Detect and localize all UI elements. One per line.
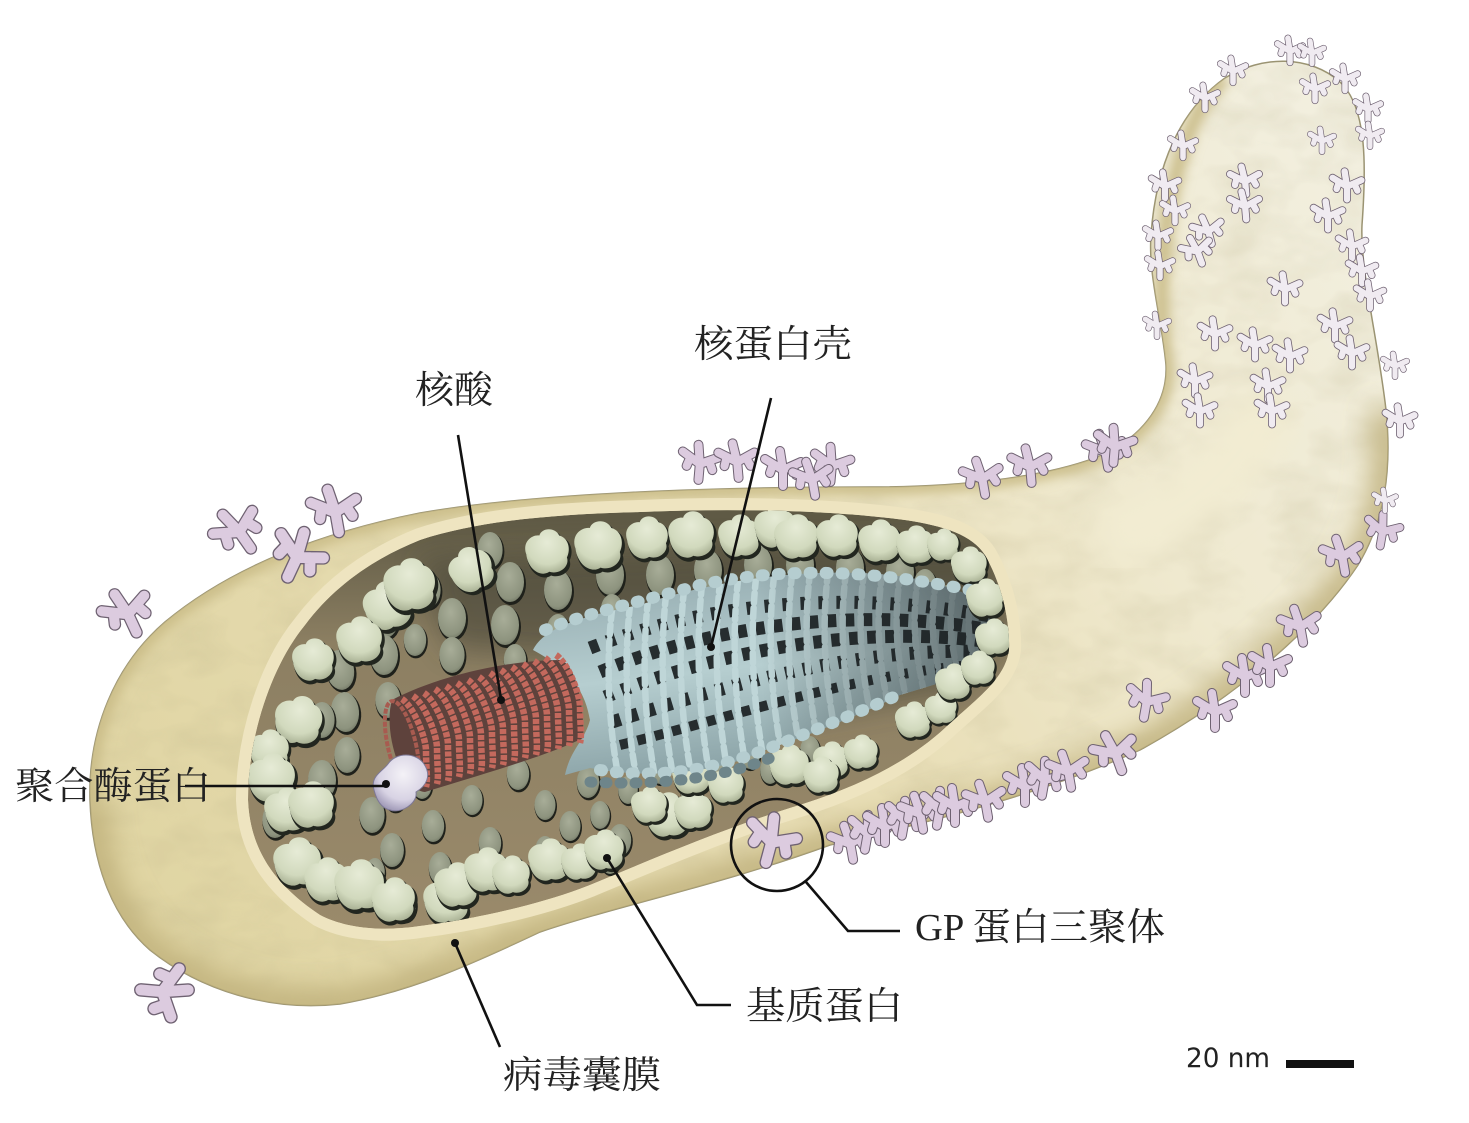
viral envelope outer body (80, 50, 1400, 1020)
leader line: nucleocapsid (707, 398, 771, 651)
leader line: nucleic acid (458, 435, 505, 704)
cut rim around the opening (248, 510, 1009, 929)
nucleic acid coil (378, 655, 583, 794)
GP trimers on lower envelope and cut section (98, 426, 1402, 1018)
leader line: envelope (451, 939, 500, 1047)
label: viral envelope: 病毒囊膜 (503, 1055, 661, 1097)
matrix protein lattice: pale ring (247, 505, 989, 927)
polymerase protein (373, 755, 428, 811)
scale bar: 20 nm (1186, 1043, 1270, 1074)
matrix protein lattice: far wall and floor (252, 532, 963, 923)
leader line: matrix protein (603, 854, 731, 1005)
label: nucleic acid: 核酸 (415, 370, 494, 412)
callout circle around GP trimer (731, 799, 823, 891)
label: GP trimer: GP 蛋白三聚体 (915, 907, 1165, 949)
GP trimers on upper tube (1145, 38, 1414, 511)
matrix protein on near right wall (935, 578, 1013, 703)
leader line: polymerase (185, 780, 390, 788)
leader line: GP trimer (806, 882, 900, 931)
inner cavity (247, 505, 1013, 929)
scale bar (1186, 1043, 1354, 1074)
label: nucleocapsid: 核蛋白壳 (694, 324, 852, 366)
label: polymerase: 聚合酶蛋白 (15, 766, 211, 808)
label: matrix protein: 基质蛋白 (746, 986, 903, 1028)
nucleocapsid shell (520, 560, 1010, 790)
